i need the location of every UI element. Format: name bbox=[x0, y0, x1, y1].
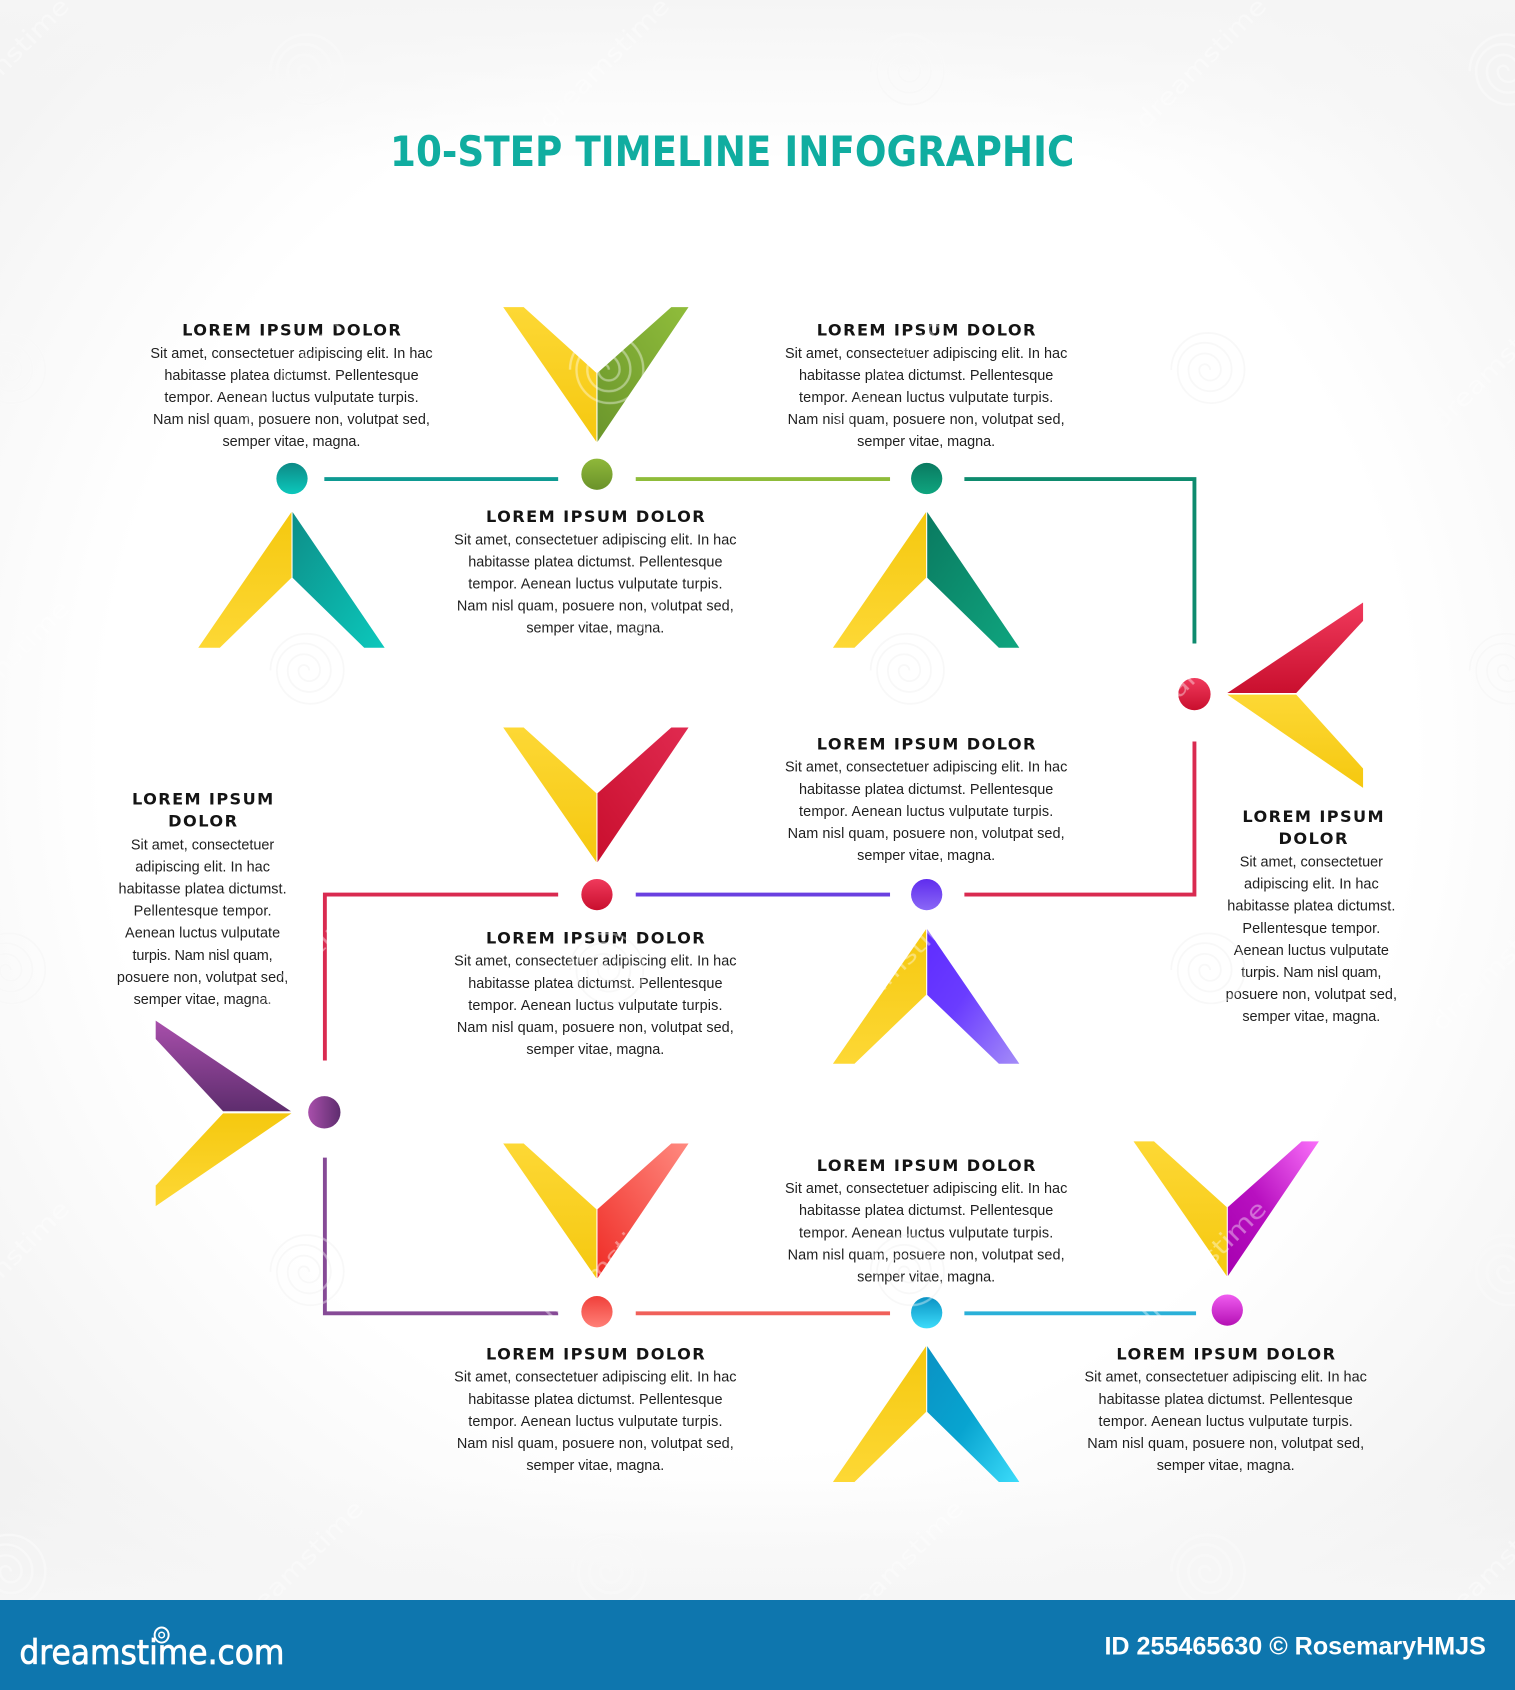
dot 9 bbox=[911, 1297, 942, 1328]
dot 8 bbox=[581, 1296, 613, 1327]
text 2: LOREM IPSUM DOLOR bbox=[486, 507, 705, 526]
text 4: Sit amet, consectetuer bbox=[1240, 855, 1383, 871]
text 1: habitasse platea dictumst. Pellentesque bbox=[164, 368, 419, 384]
arrow 7 bbox=[156, 1021, 291, 1206]
text 1: LOREM IPSUM DOLOR bbox=[182, 321, 401, 340]
text 6: habitasse platea dictumst. Pellentesque bbox=[468, 976, 722, 992]
text 4: posuere non, volutpat sed, bbox=[1226, 987, 1397, 1003]
arrow 4 bbox=[1227, 602, 1363, 788]
text 2: Nam nisl quam, posuere non, volutpat sed, bbox=[457, 599, 734, 615]
watermark overlay in translucent white: dreamstime bbox=[533, 595, 675, 737]
dot 10 bbox=[1212, 1294, 1243, 1326]
text 4: turpis. Nam nisl quam, bbox=[1241, 965, 1381, 981]
text 5: LOREM IPSUM DOLOR bbox=[817, 735, 1036, 754]
text 10: LOREM IPSUM DOLOR bbox=[1116, 1345, 1336, 1364]
text 6: tempor. Aenean luctus vulputate turpis. bbox=[468, 998, 722, 1014]
step 7: purple left bbox=[117, 790, 340, 1206]
watermark overlay in translucent white: dreamstime bbox=[827, 1495, 970, 1637]
step 10: magenta bbox=[1085, 1141, 1367, 1474]
text 5: semper vitae, magna. bbox=[857, 848, 995, 864]
text 1 bbox=[150, 321, 433, 450]
text 10: semper vitae, magna. bbox=[1157, 1458, 1295, 1474]
text 2: Sit amet, consectetuer adipiscing elit. In hac bbox=[454, 532, 736, 548]
step 8: coral bbox=[454, 1144, 736, 1474]
text 4: Aenean luctus vulputate bbox=[1234, 943, 1389, 959]
text 9: Nam nisl quam, posuere non, volutpat sed, bbox=[788, 1247, 1065, 1263]
text 8 bbox=[454, 1345, 736, 1474]
arrow 8 bbox=[503, 1144, 689, 1278]
text 7: posuere non, volutpat sed, bbox=[117, 970, 288, 986]
text 8: Nam nisl quam, posuere non, volutpat sed, bbox=[457, 1436, 734, 1452]
text 5: tempor. Aenean luctus vulputate turpis. bbox=[799, 804, 1053, 820]
watermark overlay in translucent white: dreamstime bbox=[227, 894, 369, 1037]
text 8: Sit amet, consectetuer adipiscing elit. In hac bbox=[454, 1370, 736, 1386]
text 3: habitasse platea dictumst. Pellentesque bbox=[799, 368, 1053, 384]
text 10: Nam nisl quam, posuere non, volutpat sed, bbox=[1087, 1436, 1364, 1452]
text 3: tempor. Aenean luctus vulputate turpis. bbox=[799, 390, 1053, 406]
footer bar bbox=[0, 1600, 1515, 1690]
step 5: violet bbox=[785, 735, 1067, 1064]
text 7 bbox=[117, 790, 288, 1008]
step 1: teal bbox=[150, 321, 433, 648]
dot 6 bbox=[581, 879, 613, 910]
text 6: Sit amet, consectetuer adipiscing elit. In hac bbox=[454, 954, 736, 970]
text 8: LOREM IPSUM DOLOR bbox=[486, 1345, 705, 1364]
text 10: tempor. Aenean luctus vulputate turpis. bbox=[1099, 1414, 1353, 1430]
text 6: Nam nisl quam, posuere non, volutpat sed, bbox=[457, 1020, 734, 1036]
text 7: semper vitae, magna. bbox=[134, 992, 272, 1008]
footer credit: ID 255465630 © RosemaryHMJS bbox=[1104, 1633, 1486, 1660]
text 8: semper vitae, magna. bbox=[526, 1458, 664, 1474]
dot 2 bbox=[581, 459, 613, 490]
text 8: habitasse platea dictumst. Pellentesque bbox=[468, 1392, 722, 1408]
arrow 10 bbox=[1134, 1141, 1319, 1276]
arrow 2 bbox=[503, 307, 689, 442]
text 7: habitasse platea dictumst. bbox=[119, 881, 287, 898]
text 1: Sit amet, consectetuer adipiscing elit. In hac bbox=[150, 346, 433, 362]
dot 3 bbox=[911, 463, 942, 494]
step 6: crimson bbox=[454, 728, 736, 1058]
arrow 9 bbox=[833, 1346, 1019, 1482]
text 3: Nam nisl quam, posuere non, volutpat sed, bbox=[788, 412, 1065, 428]
text 9: Sit amet, consectetuer adipiscing elit. In hac bbox=[785, 1181, 1067, 1197]
watermark overlay in translucent white: dreamstime bbox=[827, 894, 970, 1037]
text 9: habitasse platea dictumst. Pellentesque bbox=[799, 1203, 1053, 1219]
text 9: semper vitae, magna. bbox=[857, 1270, 995, 1286]
title: 10-STEP TIMELINE INFOGRAPHIC bbox=[390, 127, 1074, 176]
text 10 bbox=[1085, 1345, 1367, 1474]
text 6: semper vitae, magna. bbox=[526, 1042, 664, 1058]
text 1: Nam nisl quam, posuere non, volutpat sed, bbox=[153, 412, 430, 428]
arrow 6 bbox=[503, 728, 689, 862]
text 7: Aenean luctus vulputate bbox=[125, 926, 280, 942]
text 5 bbox=[785, 735, 1067, 864]
arrow 1 bbox=[198, 512, 385, 648]
step 9: blue bbox=[785, 1156, 1067, 1482]
dot 7 bbox=[308, 1096, 340, 1128]
text 3: Sit amet, consectetuer adipiscing elit. In hac bbox=[785, 346, 1067, 362]
connector lines bbox=[324, 479, 1196, 1313]
footer logo: dreamstime.com bbox=[19, 1633, 284, 1672]
text 6 bbox=[454, 929, 736, 1058]
text 4: adipiscing elit. In hac bbox=[1244, 877, 1379, 893]
text 4: semper vitae, magna. bbox=[1242, 1009, 1380, 1025]
text 4 bbox=[1226, 807, 1397, 1025]
text 4: LOREM IPSUM bbox=[1242, 807, 1384, 826]
step 2: green bbox=[454, 307, 736, 637]
text 3: semper vitae, magna. bbox=[857, 434, 995, 450]
text 2 bbox=[454, 507, 736, 637]
watermark overlay in translucent white: dreamstime bbox=[227, 293, 369, 435]
watermark overlay in translucent white: dreamstime bbox=[827, 293, 970, 435]
text 5: Sit amet, consectetuer adipiscing elit. In hac bbox=[785, 760, 1067, 776]
text 3: LOREM IPSUM DOLOR bbox=[817, 321, 1036, 340]
watermark overlay in translucent white: dreamstime bbox=[1130, 0, 1272, 135]
text 1: tempor. Aenean luctus vulputate turpis. bbox=[164, 390, 419, 406]
text 10: Sit amet, consectetuer adipiscing elit. In hac bbox=[1085, 1370, 1367, 1386]
text 5: habitasse platea dictumst. Pellentesque bbox=[799, 782, 1053, 798]
watermark overlay in translucent white: dreamstime bbox=[1130, 595, 1272, 737]
text 8: tempor. Aenean luctus vulputate turpis. bbox=[468, 1414, 722, 1430]
watermark overlay in translucent white: dreamstime bbox=[533, 0, 675, 135]
text 7: Sit amet, consectetuer bbox=[131, 837, 274, 853]
arrow 5 bbox=[833, 929, 1019, 1064]
watermark overlay in translucent white: dreamstime bbox=[227, 1495, 369, 1637]
text 1: semper vitae, magna. bbox=[223, 434, 360, 450]
text 7: LOREM IPSUM bbox=[132, 790, 273, 809]
text 2: tempor. Aenean luctus vulputate turpis. bbox=[468, 576, 722, 592]
text 9 bbox=[785, 1156, 1067, 1286]
text 4: DOLOR bbox=[1278, 829, 1348, 848]
text 2: habitasse platea dictumst. Pellentesque bbox=[468, 554, 722, 570]
arrow 3 bbox=[833, 512, 1019, 648]
text 10: habitasse platea dictumst. Pellentesque bbox=[1099, 1392, 1353, 1408]
watermark overlay in translucent white: dreamstime bbox=[1130, 1195, 1272, 1337]
text 7: DOLOR bbox=[168, 812, 238, 831]
dot 4 bbox=[1178, 678, 1211, 710]
dot 5 bbox=[911, 879, 942, 910]
text 7: turpis. Nam nisl quam, bbox=[133, 948, 273, 964]
text 2: semper vitae, magna. bbox=[526, 621, 664, 637]
text 7: Pellentesque tempor. bbox=[134, 904, 272, 920]
text 9: tempor. Aenean luctus vulputate turpis. bbox=[799, 1225, 1053, 1241]
text 6: LOREM IPSUM DOLOR bbox=[486, 929, 705, 948]
text 4: Pellentesque tempor. bbox=[1242, 921, 1380, 937]
text 5: Nam nisl quam, posuere non, volutpat sed, bbox=[788, 826, 1065, 842]
text 4: habitasse platea dictumst. bbox=[1227, 899, 1395, 915]
text 3 bbox=[785, 321, 1067, 450]
step 3: dark green bbox=[785, 321, 1067, 648]
step 4: crimson right bbox=[1178, 602, 1397, 1025]
text 7: adipiscing elit. In hac bbox=[135, 859, 270, 875]
text 9: LOREM IPSUM DOLOR bbox=[817, 1156, 1036, 1175]
watermark overlay in translucent white: dreamstime bbox=[533, 1195, 675, 1337]
dot 1 bbox=[276, 463, 308, 494]
